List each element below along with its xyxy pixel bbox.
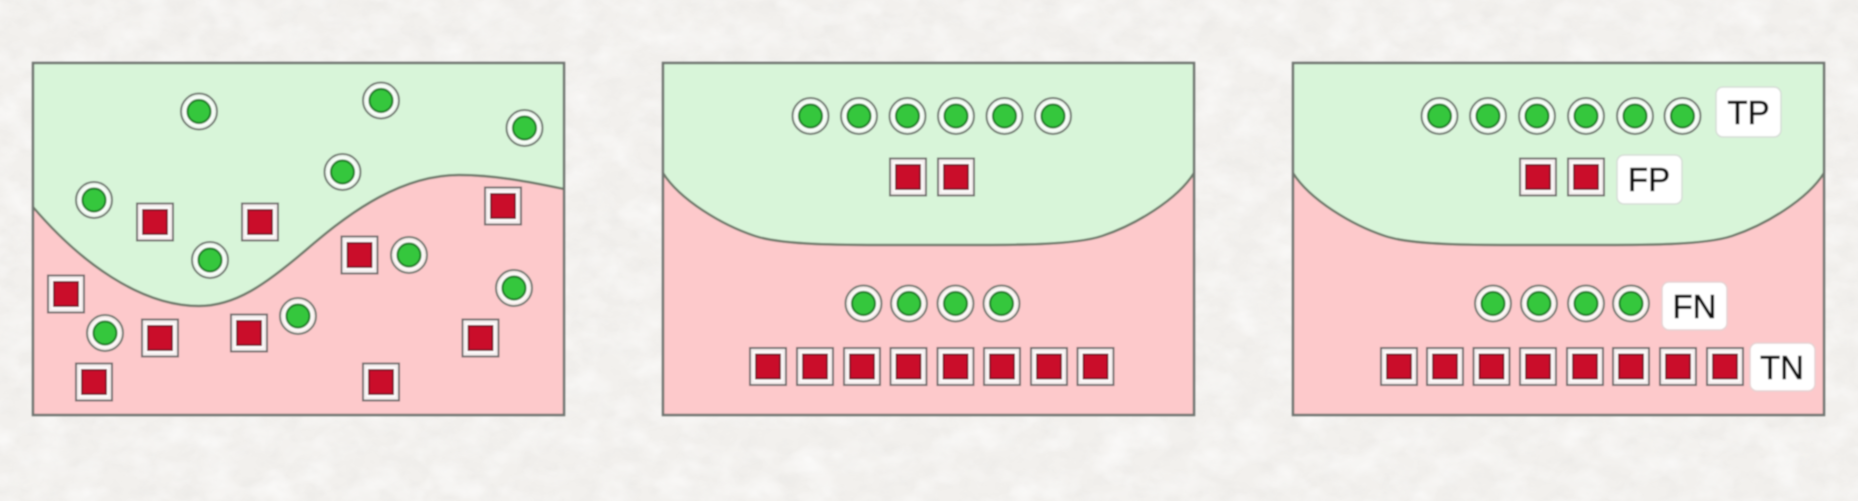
positive region: green area above curved boundary [663, 63, 1194, 245]
row of two red squares [890, 158, 974, 196]
label: FN [1662, 282, 1727, 330]
panel: scattered data with wavy decision boundary [33, 63, 564, 415]
wavy decision boundary curve [33, 175, 564, 306]
positive region: green area above curved boundary [1293, 63, 1824, 245]
false positive squares [1520, 158, 1604, 196]
positive region: green area above wavy boundary [33, 63, 564, 306]
panel: sorted points by predicted region [663, 63, 1194, 415]
scattered green circles [76, 82, 542, 351]
label: FN: FN [1672, 288, 1716, 325]
label: FP: FP [1628, 161, 1670, 198]
row of six green circles [792, 98, 1071, 134]
label: TN: TN [1760, 349, 1804, 386]
curved decision boundary [1293, 173, 1824, 245]
label: TN [1750, 343, 1815, 391]
panel frame [1293, 63, 1824, 415]
row of four green circles [846, 286, 1020, 322]
scattered red squares [48, 188, 521, 400]
label: TP [1716, 87, 1781, 137]
row of eight red squares [750, 348, 1114, 385]
panel frame [663, 63, 1194, 415]
true negative squares [1381, 348, 1743, 385]
label: FP [1617, 155, 1682, 204]
true positive circles [1422, 98, 1700, 134]
curved decision boundary [663, 173, 1194, 245]
false negative circles [1475, 286, 1649, 322]
panel: sorted points with TP FP FN TN labels [1293, 63, 1824, 415]
label: TP: TP [1727, 94, 1770, 131]
panel frame [33, 63, 564, 415]
